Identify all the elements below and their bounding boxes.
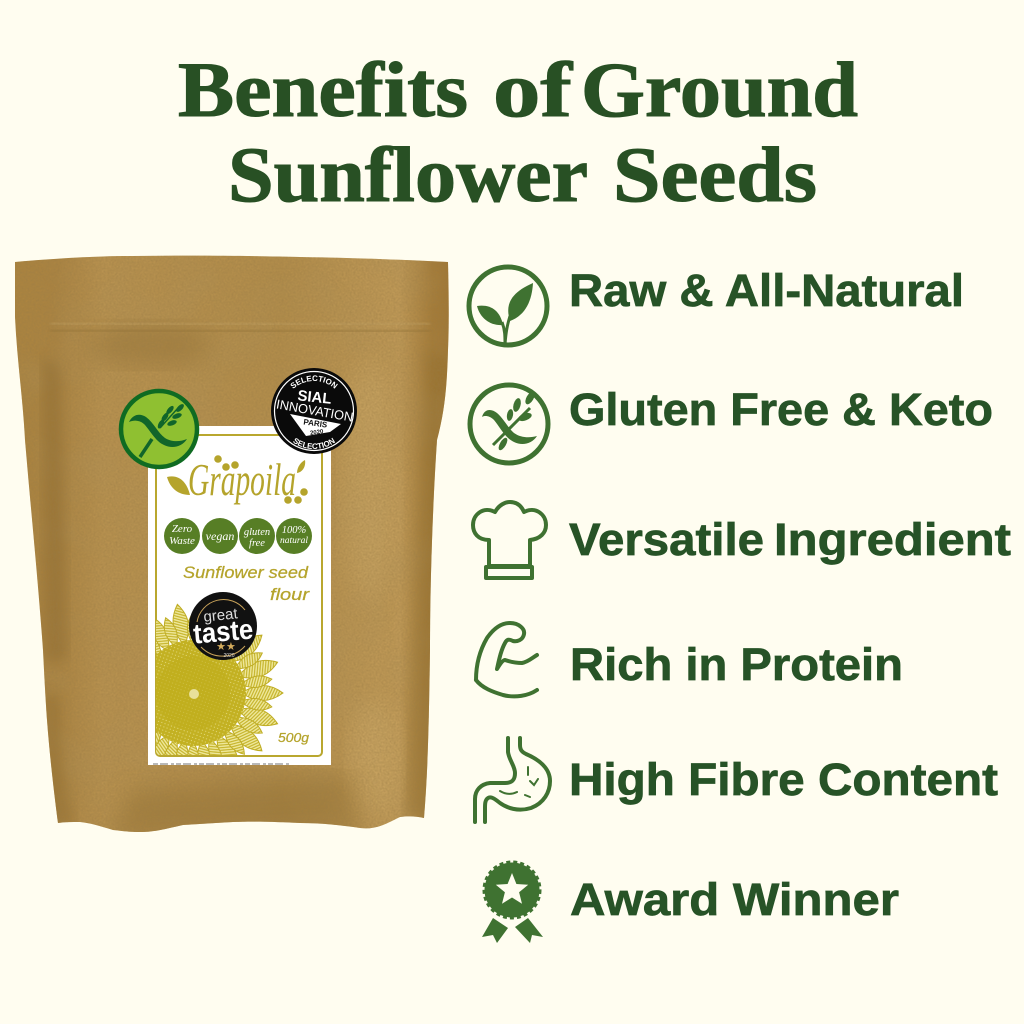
benefit: raw and natural: Raw & All-Natural: [569, 265, 964, 316]
brand logo: [167, 455, 308, 505]
SIAL innovation badge: [271, 368, 357, 454]
fine print: [153, 763, 290, 765]
SIAL innovation badge: SELECTION: [293, 438, 336, 449]
SIAL innovation badge: SELECTION: [290, 375, 338, 389]
badges row: vegan: [206, 529, 234, 543]
SIAL innovation badge: PARIS: [303, 417, 328, 430]
icon: flexed arm: [476, 623, 537, 696]
SIAL innovation badge: 2020: [310, 429, 325, 437]
great taste award: ★★: [216, 640, 236, 653]
great taste award: [189, 592, 257, 660]
SIAL innovation badge: INNOVATION: [275, 396, 354, 425]
product pouch: [15, 256, 449, 832]
benefit: versatile ingredient: Ingredient: [774, 514, 1011, 565]
great taste award: taste: [192, 613, 254, 650]
title: Benefits: [178, 46, 468, 133]
benefit: protein: [476, 623, 903, 696]
title: [178, 46, 858, 218]
white label: [148, 426, 331, 765]
badges row: Waste: [169, 535, 195, 547]
benefit: award: Award Winner: [570, 874, 899, 925]
brand logo: Grapoila: [188, 455, 296, 505]
benefit: protein: Rich in Protein: [570, 639, 903, 690]
icon: sprout: [469, 267, 547, 345]
great taste award: great: [203, 605, 239, 626]
product name: flour: [270, 585, 311, 604]
product name: Sunflower seed: [183, 563, 309, 582]
sunflower illustration: [156, 604, 284, 755]
badges row: 100%: [282, 525, 306, 536]
benefit: gluten free: Gluten Free & Keto: [569, 384, 993, 435]
benefit: award: [482, 862, 899, 943]
icon: stomach: [475, 738, 550, 822]
benefit: versatile ingredient: Versatile: [569, 514, 764, 565]
SIAL innovation badge: SIAL: [297, 387, 332, 408]
badges row: gluten: [244, 527, 270, 538]
kraft bag body: [0, 250, 470, 840]
gluten free badge: [121, 391, 197, 467]
badges row: free: [249, 538, 265, 549]
icon: crossed wheat: [470, 385, 548, 463]
badges row: Zero: [172, 523, 193, 535]
benefit: gluten free: [470, 384, 993, 463]
title: Sunflower: [228, 131, 588, 218]
benefit: versatile ingredient: [473, 502, 1011, 578]
weight: 500g: [278, 730, 310, 745]
benefit: raw and natural: [469, 265, 964, 345]
title: of: [493, 46, 573, 133]
product name: [183, 563, 311, 604]
badges row: [164, 518, 312, 554]
great taste award: 2020: [223, 653, 235, 659]
icon: chef hat: [473, 502, 546, 578]
title: Ground: [581, 46, 858, 133]
benefit: fibre: [475, 738, 998, 822]
benefit: fibre: High Fibre Content: [569, 754, 998, 805]
icon: rosette: [482, 862, 543, 943]
title: Seeds: [613, 131, 817, 218]
badges row: natural: [280, 536, 308, 546]
